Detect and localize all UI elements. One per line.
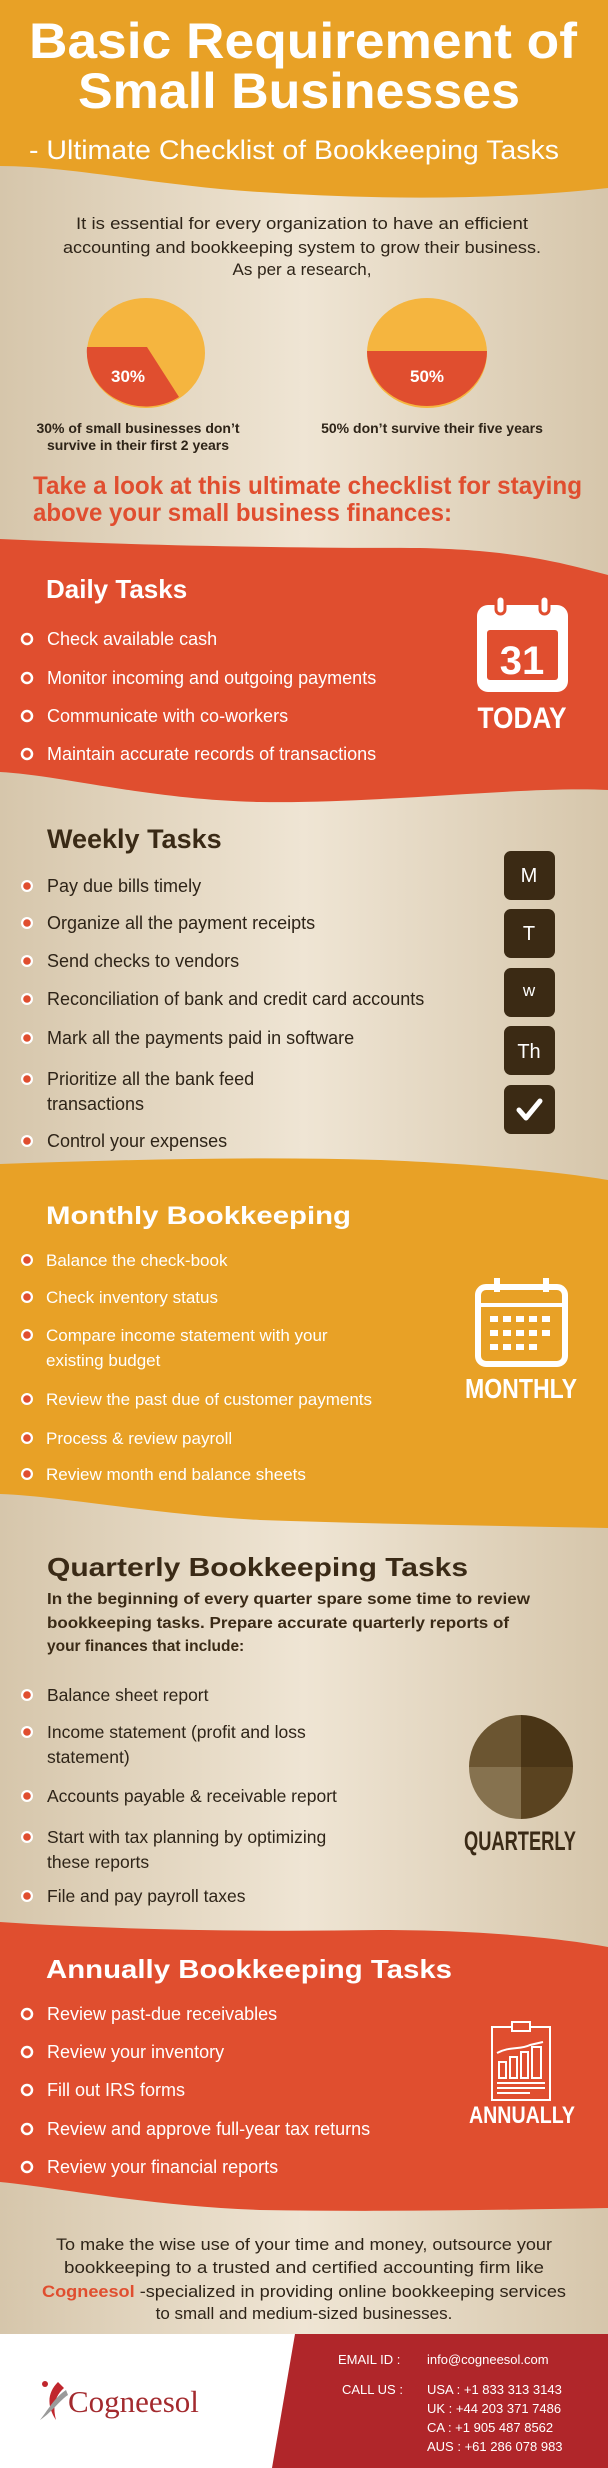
intro text: accounting and bookkeeping system to grow their business. <box>63 238 541 257</box>
list: weekly items: Pay due bills timely <box>47 876 201 896</box>
pie chart: 50%: 50% <box>410 367 444 386</box>
list: quarterly items: Start with tax planning by optimizing <box>47 1827 326 1847</box>
heading: monthly: Monthly Bookkeeping <box>46 1202 351 1230</box>
intro text: It is essential for every organization to have an efficient <box>76 214 528 233</box>
list: quarterly items: Balance sheet report <box>47 1685 209 1705</box>
list: quarterly items: statement) <box>47 1747 130 1767</box>
list: quarterly items <box>21 1685 337 1906</box>
list: annual items: Review your inventory <box>47 2042 224 2062</box>
heading: weekly: Weekly Tasks <box>47 824 222 854</box>
list: annual items: Review your financial reports <box>47 2157 278 2177</box>
pie captions <box>36 420 543 453</box>
contact info: CALL US : <box>342 2382 403 2397</box>
logo: Cogneesol <box>68 2384 199 2419</box>
closing paragraph: To make the wise use of your time and money, outsource your <box>56 2235 552 2254</box>
panel: annually bookkeeping <box>0 1922 608 2211</box>
heading: daily: Daily Tasks <box>46 574 187 604</box>
title: Basic Requirement of <box>29 13 577 69</box>
closing paragraph: to small and medium-sized businesses. <box>156 2304 452 2323</box>
list: monthly items: Balance the check-book <box>46 1251 228 1270</box>
list: monthly items: Check inventory status <box>46 1288 218 1307</box>
icon: annual report clipboard <box>492 2022 550 2100</box>
subtitle: - Ultimate Checklist of Bookkeeping Tasks <box>29 135 559 165</box>
icon: calendar today <box>477 596 568 735</box>
icon: monthly calendar <box>465 1278 577 1404</box>
heading: quarterly: Quarterly Bookkeeping Tasks <box>47 1552 468 1582</box>
list: monthly items: Compare income statement with your <box>46 1326 328 1345</box>
intro text: As per a research, <box>233 260 371 279</box>
list: weekly items: Prioritize all the bank feed <box>47 1069 254 1089</box>
list: quarterly items: Income statement (profit and loss <box>47 1722 306 1742</box>
contact info: UK : +44 203 371 7486 <box>427 2401 561 2416</box>
icon: weekday boxes <box>504 851 555 1134</box>
panel: quarterly bookkeeping <box>21 1552 576 1906</box>
list: annual items <box>22 2004 370 2177</box>
contact info: info@cogneesol.com <box>427 2352 549 2367</box>
panel: daily tasks <box>0 539 608 802</box>
list: annual items: Review and approve full-year tax returns <box>47 2119 370 2139</box>
icon: monthly calendar: MONTHLY <box>465 1373 577 1404</box>
pie captions: 30% of small businesses don’t <box>36 420 240 436</box>
pie chart: 30%: 30% <box>111 367 145 386</box>
text: quarterly intro <box>47 1591 531 1655</box>
icon: weekday boxes: Th <box>517 1041 541 1063</box>
title <box>29 13 577 119</box>
icon: quarterly pie <box>464 1715 576 1856</box>
pie chart: 50% <box>367 298 487 408</box>
list: monthly items: Process & review payroll <box>46 1429 232 1448</box>
list: annual items: Fill out IRS forms <box>47 2080 185 2100</box>
list: quarterly items: Accounts payable & receivable report <box>47 1786 337 1806</box>
contact info <box>338 2352 563 2454</box>
contact info: AUS : +61 286 078 983 <box>427 2439 563 2454</box>
icon: weekday boxes: M <box>521 865 537 887</box>
footer <box>0 2334 608 2468</box>
contact info: CA : +1 905 487 8562 <box>427 2420 553 2435</box>
call-to-action heading: Take a look at this ultimate checklist for staying <box>33 472 582 500</box>
text: quarterly intro: In the beginning of every quarter spare some time to review <box>47 1591 531 1608</box>
icon: weekday boxes: T <box>523 923 535 945</box>
list: quarterly items: File and pay payroll taxes <box>47 1886 246 1906</box>
list: monthly items: Review month end balance sheets <box>46 1465 306 1484</box>
pie chart: 30% <box>87 298 205 408</box>
text: quarterly intro: your finances that include: <box>47 1638 244 1655</box>
list: daily items <box>22 629 376 764</box>
icon: weekday boxes: w <box>522 981 536 1000</box>
list: monthly items: Review the past due of customer payments <box>46 1390 372 1409</box>
list: annual items: Review past-due receivables <box>47 2004 277 2024</box>
heading: annually: Annually Bookkeeping Tasks <box>46 1954 452 1984</box>
panel: monthly bookkeeping <box>0 1158 608 1528</box>
list: weekly items <box>21 876 424 1151</box>
list: weekly items: Send checks to vendors <box>47 951 239 971</box>
list: weekly items: Mark all the payments paid in software <box>47 1028 354 1048</box>
icon: calendar today: 31 <box>500 639 544 683</box>
call-to-action heading: above your small business finances: <box>33 499 452 527</box>
list: monthly items: existing budget <box>46 1351 161 1370</box>
list: monthly items <box>21 1251 372 1484</box>
title: Small Businesses <box>78 63 520 119</box>
intro text <box>63 214 541 279</box>
list: quarterly items: these reports <box>47 1852 149 1872</box>
list: daily items: Check available cash <box>47 629 217 649</box>
closing paragraph: Cogneesol -specialized in providing online bookkeeping services <box>42 2282 566 2301</box>
closing paragraph: bookkeeping to a trusted and certified accounting firm like <box>64 2258 544 2277</box>
list: daily items: Monitor incoming and outgoing payments <box>47 668 376 688</box>
text: quarterly intro: bookkeeping tasks. Prepare accurate quarterly reports of <box>47 1615 510 1632</box>
contact info: USA : +1 833 313 3143 <box>427 2382 562 2397</box>
list: weekly items: Control your expenses <box>47 1131 227 1151</box>
contact info: EMAIL ID : <box>338 2352 400 2367</box>
list: weekly items: Reconciliation of bank and credit card accounts <box>47 989 424 1009</box>
icon: calendar today: TODAY <box>478 702 566 735</box>
list: weekly items: Organize all the payment receipts <box>47 913 315 933</box>
list: daily items: Maintain accurate records of transactions <box>47 744 376 764</box>
pie captions: 50% don’t survive their five years <box>321 420 543 436</box>
panel: weekly tasks <box>21 824 555 1151</box>
pie captions: survive in their first 2 years <box>47 437 229 453</box>
call-to-action heading <box>33 472 582 527</box>
list: weekly items: transactions <box>47 1094 144 1114</box>
list: daily items: Communicate with co-workers <box>47 706 288 726</box>
header banner <box>0 0 608 198</box>
label: annually: ANNUALLY <box>469 2102 575 2129</box>
closing paragraph <box>42 2235 566 2323</box>
